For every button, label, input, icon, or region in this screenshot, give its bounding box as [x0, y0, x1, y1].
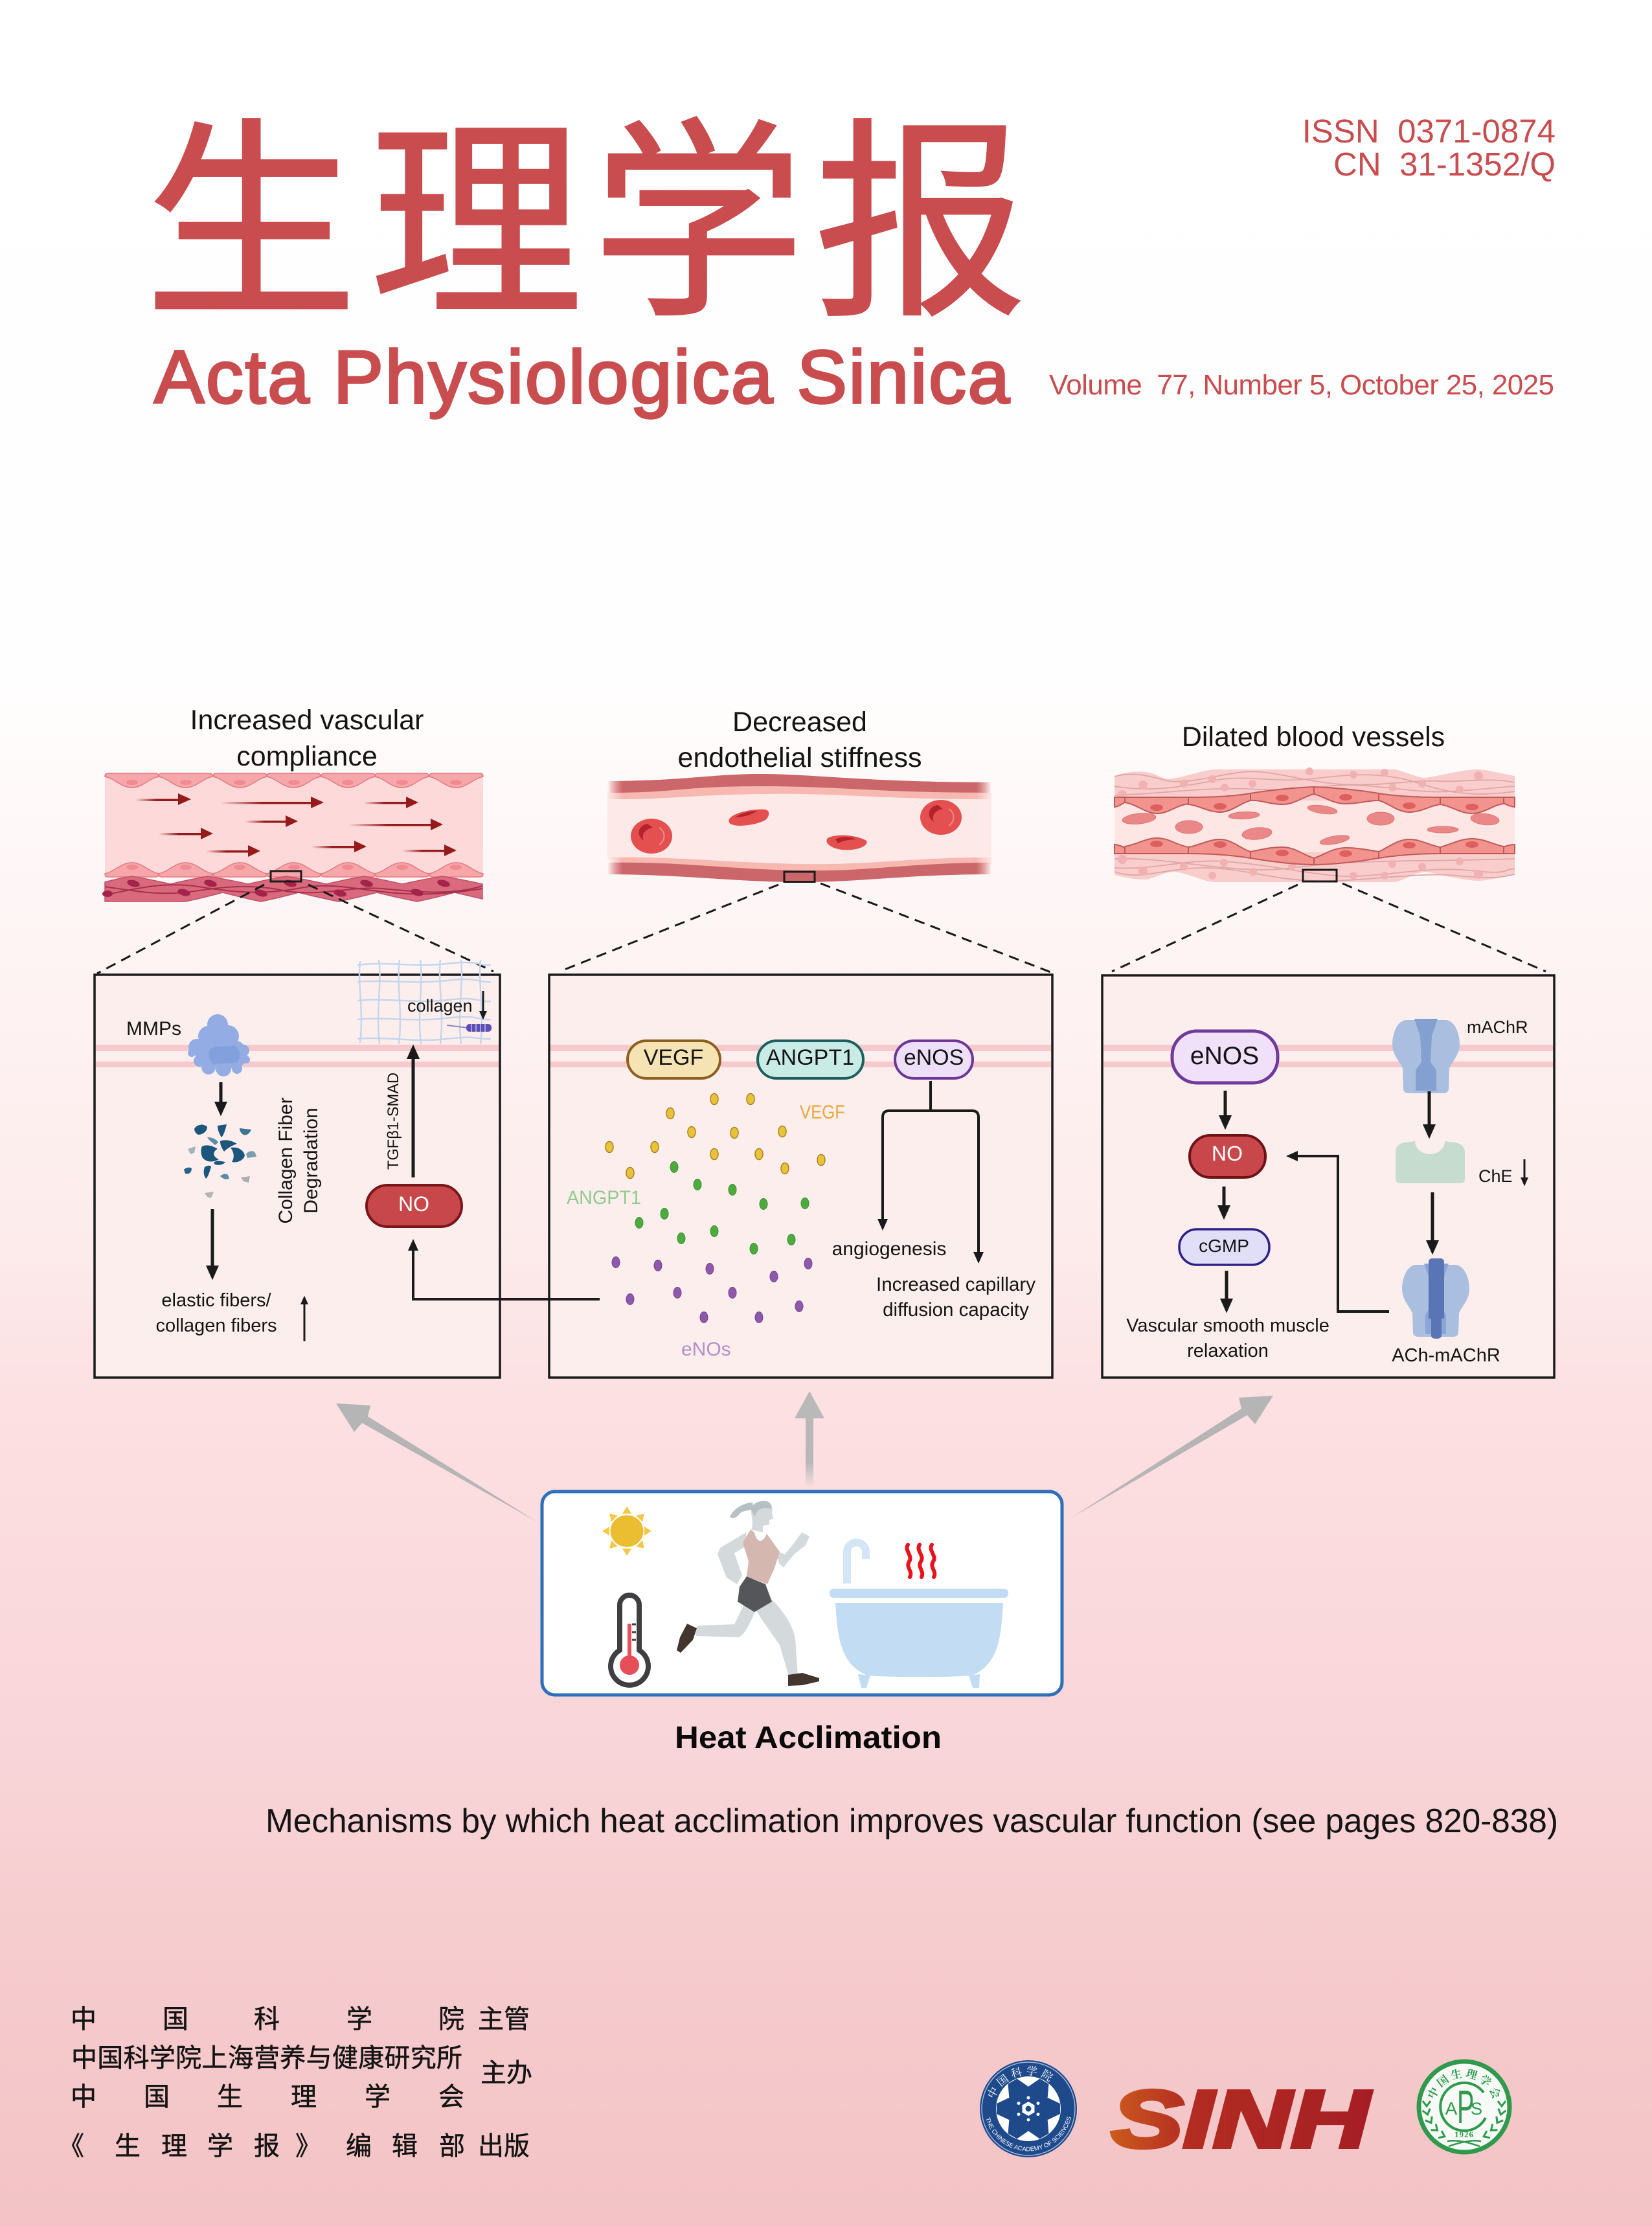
arrow: ChE to ACh-mAChR [1431, 1192, 1434, 1247]
arrow: collagen decrease [482, 991, 484, 1015]
torso [743, 1530, 780, 1584]
sponsor 1: 中国科学院上海营养与健康研究所 [71, 2044, 462, 2073]
endothelial layer, top [1115, 787, 1515, 813]
logo: Chinese Association for Physiological Sciences: A [1445, 2098, 1458, 2118]
icon: collagen fragments [184, 1124, 256, 1198]
cover caption: Mechanisms by which heat acclimation improves vascular function (see pages 820-838) [266, 1802, 1558, 1839]
heading: increased vascular compliance [190, 705, 424, 772]
label: increased capillary diffusion capacity: diffusion capacity [883, 1299, 1029, 1321]
logo: Chinese Association for Physiological Sciences [1417, 2060, 1511, 2154]
pill: NO: NO [1212, 1142, 1243, 1165]
logo: Chinese Academy of Sciences [980, 2060, 1077, 2157]
heading: dilated blood vessels: Dilated blood vessels [1182, 721, 1445, 753]
icon: sun [602, 1506, 651, 1556]
pill: eNOS [895, 1041, 973, 1078]
label: increased capillary diffusion capacity [876, 1274, 1035, 1321]
arrow: cGMP to relaxation [1225, 1271, 1228, 1305]
icon: bathtub [830, 1543, 1008, 1688]
publisher: 《生理学报》编辑部 [58, 2132, 465, 2161]
ISSN and CN numbers: CN 31-1352/Q [1333, 146, 1556, 183]
label: elastic fibers / collagen fibers: collagen fibers [155, 1315, 277, 1336]
label: VEGF particles: VEGF [800, 1102, 845, 1123]
logo: Chinese Academy of Sciences: THE CHINESE ACADEMY OF SCIENCES [986, 2117, 1071, 2152]
panel: heat acclimation illustration [542, 1492, 1062, 1695]
wreath [1423, 2101, 1506, 2146]
pill: NO [1190, 1135, 1265, 1177]
sponsor 2: 中国生理学会 [71, 2083, 464, 2111]
logo: Chinese Association for Physiological Sciences: 中国生理学会 [1428, 2069, 1500, 2098]
zoom indicator: dilated vessel to panel [1112, 870, 1546, 971]
pill: ANGPT1: ANGPT1 [766, 1045, 854, 1070]
label: angiogenesis: angiogenesis [832, 1238, 946, 1260]
arrow: eNOs to NO [413, 1245, 600, 1299]
publisher block [58, 2005, 532, 2161]
icon: ACh-mAChR receptor [1402, 1258, 1469, 1339]
heading: increased vascular compliance: Increased vascular [190, 705, 424, 736]
smooth muscle layer [102, 876, 482, 902]
endothelial cells, bottom [105, 863, 483, 877]
label: collagen: collagen [407, 996, 473, 1016]
endothelial cells, top [105, 773, 483, 788]
pill: NO [367, 1185, 462, 1227]
front arm [776, 1532, 809, 1567]
pill: eNOS: eNOS [904, 1045, 964, 1070]
label: vascular smooth muscle relaxation: relaxation [1187, 1341, 1269, 1361]
label: elastic fibers / collagen fibers: elastic fibers/ [161, 1290, 272, 1311]
red blood cells [631, 800, 962, 854]
label: sponsor: 主办 [481, 2059, 532, 2087]
pill: eNOS [1172, 1031, 1278, 1083]
pill: eNOS: eNOS [1190, 1042, 1259, 1070]
label: mAChR: mAChR [1467, 1017, 1528, 1037]
endothelial layer, bottom [1115, 838, 1515, 865]
shorts [738, 1576, 772, 1612]
pill: cGMP [1179, 1229, 1269, 1265]
red blood cells [1122, 804, 1500, 846]
back shoe [677, 1624, 697, 1653]
panel: endothelial stiffness mechanism [549, 975, 1052, 1378]
icon: steam [907, 1545, 934, 1577]
journal title: Chinese: 生理学报 [144, 51, 1027, 359]
label: publishes: 出版 [478, 2132, 530, 2161]
label: collagen fiber degradation: Collagen Fiber [275, 1097, 297, 1224]
collagen mesh [357, 960, 491, 1044]
label: heat acclimation: Heat Acclimation [675, 1721, 942, 1755]
arrow: heat acclimation to dilated panel [1072, 1396, 1273, 1517]
branching arrows from eNOS [883, 1081, 979, 1257]
vessel: endothelial [607, 774, 991, 882]
arrow: eNOS to NO [1224, 1091, 1227, 1122]
journal title: English: Acta Physiologica Sinica [154, 335, 1010, 419]
label: supervisor: 主管 [478, 2005, 530, 2034]
icon: mAChR receptor [1392, 1019, 1460, 1093]
arrow: NO to collagen via TGF [412, 1052, 414, 1177]
supervising body: 中国科学院 [71, 2005, 464, 2034]
label: TGFb1-SMAD: TGFβ1-SMAD [385, 1073, 402, 1170]
label: ACh-mAChR: ACh-mAChR [1392, 1345, 1500, 1366]
lumen [1115, 801, 1515, 852]
pill: VEGF [628, 1041, 720, 1078]
head [751, 1501, 773, 1532]
ISSN and CN numbers: ISSN 0371-0874 [1302, 113, 1556, 150]
ISSN and CN numbers [1302, 113, 1556, 183]
vessel: dilated [1115, 767, 1515, 882]
arrow: ACh-mAChR to NO [1293, 1156, 1389, 1312]
pill: cGMP: cGMP [1199, 1236, 1249, 1256]
logo: SINH: SINH [1111, 2074, 1372, 2164]
icon: runner [677, 1501, 819, 1686]
label: vascular smooth muscle relaxation: Vascular smooth muscle [1126, 1315, 1330, 1336]
label: elastic fibers / collagen fibers [155, 1290, 277, 1336]
panel: dilated blood vessels mechanism [1102, 975, 1554, 1378]
logo: Chinese Association for Physiological Sciences: P [1457, 2082, 1474, 2133]
label: ChE: ChE [1478, 1166, 1513, 1186]
label: ANGPT1 particles: ANGPT1 [567, 1187, 641, 1209]
zoom indicator: endothelial vessel to panel [560, 872, 1052, 973]
heading: increased vascular compliance: compliance [236, 741, 378, 772]
front leg [754, 1600, 798, 1676]
heading: decreased endothelial stiffness: endothelial stiffness [678, 742, 922, 773]
heading: decreased endothelial stiffness: Decreased [732, 707, 867, 738]
heading: decreased endothelial stiffness [678, 707, 922, 773]
vessel: compliance [102, 773, 483, 902]
volume and date line: Volume 77, Number 5, October 25, 2025 [1049, 369, 1554, 401]
icon: thermometer [611, 1595, 648, 1685]
back arm [718, 1532, 747, 1584]
front shoe [788, 1673, 819, 1686]
arrow: heat acclimation to endothelial panel [795, 1391, 824, 1488]
outer wall with fibers [1115, 767, 1515, 882]
panel: vascular compliance mechanism [95, 960, 500, 1378]
logo: Chinese Academy of Sciences: 中国科学院 [988, 2065, 1053, 2097]
VEGF dots [605, 1093, 825, 1179]
logo: Chinese Association for Physiological Sciences: 1926 [1454, 2129, 1474, 2139]
pill: VEGF: VEGF [644, 1045, 703, 1070]
arrow: MMP to fragments [219, 1082, 223, 1108]
arrow: NO to cGMP [1223, 1187, 1225, 1212]
eNOs dots [612, 1256, 812, 1323]
arrow: increase [303, 1300, 306, 1341]
icon: ChE enzyme [1396, 1141, 1465, 1183]
arrow: ChE decrease [1523, 1159, 1526, 1181]
endothelial nuclei [1150, 794, 1478, 857]
pill: NO: NO [398, 1192, 429, 1216]
arrow: mAChR to ChE [1427, 1091, 1431, 1131]
label: MMPs: MMPs [126, 1018, 181, 1039]
arrow: heat acclimation to compliance panel [336, 1403, 537, 1522]
label: collagen fiber degradation [275, 1097, 322, 1224]
label: increased capillary diffusion capacity: Increased capillary [876, 1274, 1035, 1295]
icon: MMP protein [188, 1014, 250, 1076]
arrow: fragments to fibers [211, 1209, 214, 1272]
label: collagen fiber degradation: Degradation [300, 1107, 322, 1214]
back leg [696, 1603, 756, 1637]
zoom indicator: compliance vessel to panel [97, 871, 493, 973]
blood flow arrows [135, 793, 457, 857]
label: eNOs particles: eNOs [681, 1339, 731, 1360]
ANGPT1 dots [635, 1162, 809, 1254]
pill: ANGPT1 [758, 1041, 863, 1078]
ponytail [730, 1503, 754, 1518]
hair cap [751, 1501, 771, 1517]
label: vascular smooth muscle relaxation [1126, 1315, 1330, 1361]
logo: Chinese Association for Physiological Sciences: S [1471, 2099, 1482, 2118]
icon: collagen fiber [447, 1024, 492, 1032]
